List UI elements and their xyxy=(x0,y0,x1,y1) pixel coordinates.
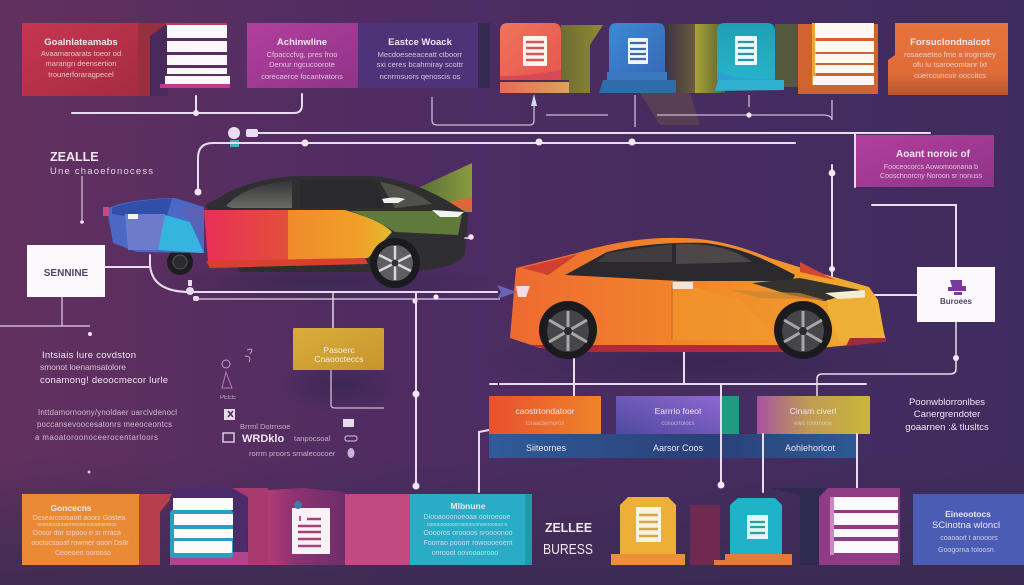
panel: bottom magenta fold band xyxy=(170,488,410,565)
text block: left description: smonot loenamsatolore xyxy=(40,362,126,372)
panel: top row red text card: trounerforaragpecel xyxy=(48,70,114,79)
text block: Wrdklo cluster: Brrml Dotrnsoe xyxy=(240,422,290,431)
panel: bottom teal text card: Mlbnune xyxy=(451,501,486,511)
panel: bottom orange text card: ooctocsaoaf rowmer ooon Ds8r xyxy=(31,540,129,547)
text block: left description: conamong! deoocmecor lurle xyxy=(40,375,168,386)
panel: top row red text card: marangn deensertion xyxy=(46,59,116,68)
text block: right description: Canergrendoter xyxy=(914,409,980,420)
panel: small gold card: Cnaoocteccs xyxy=(314,354,364,364)
panel: bottom orange text card: Dosor dor srpooo e sr rrraca xyxy=(33,530,121,537)
panel: bottom teal text card: Ooooros oroooos sroooonoo xyxy=(423,530,513,537)
panel: bottom blue text card: coaoaoit t anooors xyxy=(940,535,998,542)
icon: white stacked sheets, red xyxy=(160,23,230,88)
text block: left description: Inttdamornoony/ynoldaer uarclvdenocl xyxy=(38,408,177,417)
panel: bottom orange text card: onsroecstoosornesoonosoansronco xyxy=(37,522,117,528)
panel: bottom teal text card xyxy=(410,494,532,565)
panel: blue label band: Aarsor Coos xyxy=(653,443,704,453)
panel: top row red text card: Goalnlateamabs xyxy=(44,37,118,48)
panel: blue label band: Siiteornes xyxy=(526,443,567,453)
icon: blue document tower xyxy=(599,23,695,93)
panel: white box, right: Buroees xyxy=(940,297,973,306)
text block: Wrdklo cluster: rorrm proors srnalecocoer xyxy=(249,449,336,458)
title: left heading: ZEALLE xyxy=(50,150,99,164)
panel: mixed colour info card: Cinam civerl xyxy=(790,406,836,416)
panel: orange text card xyxy=(888,23,1008,95)
connectors: upper network xyxy=(72,94,956,278)
panel: violet text card: Eastce Woack xyxy=(388,37,453,48)
title: bottom centre wordmark: BURESS xyxy=(543,541,593,558)
title: left heading xyxy=(50,150,153,177)
panel: bottom blue text card: SCinotna wloncl xyxy=(932,520,1000,531)
panel: magenta callout xyxy=(856,135,994,187)
panel: mixed colour info card xyxy=(757,396,870,434)
panel: magenta callout: Fooceocorcs Aowomoonana b xyxy=(884,164,978,171)
panel: bottom orange text card xyxy=(22,494,175,565)
panel: violet text card: sxi ceres bcahmiray scottr xyxy=(377,60,464,69)
text block: left description: poccansevoocesatonrs meeoceontcs xyxy=(37,420,172,429)
panel: bottom blue text card: Eineootocs xyxy=(945,509,991,519)
icon: teal document tower, bottom xyxy=(714,488,825,565)
panel: small gold card xyxy=(293,328,384,370)
panel: violet info card xyxy=(616,396,739,434)
panel: orange text card: ofu iu tsaroeomtanr lxt xyxy=(913,60,988,69)
panel: orange info card: foraacternoros xyxy=(526,421,564,427)
icon: orange stacked sheets xyxy=(798,23,878,94)
panel: orange info card: caostrtondatoor xyxy=(515,406,575,416)
panel: violet info card: cosocrtolocs xyxy=(661,421,695,427)
panel: violet text card xyxy=(358,23,490,88)
panel: magenta text card: Derxur ngcucoorote xyxy=(269,60,335,69)
panel: bottom teal text card: Foorrao pooorr rowoooeoent xyxy=(423,540,513,547)
panel: magenta text card: corecaerce focantvatons xyxy=(261,72,343,81)
panel: bottom orange text card: Ceoeoert oorooso xyxy=(55,550,111,557)
panel: top row red text card: Avaamaroarats toeor od xyxy=(41,49,121,58)
text block: Wrdklo cluster: WRDklo xyxy=(242,433,284,445)
panel: bottom teal text card: Dlooaooonoeoaa ootroeooe xyxy=(424,514,510,521)
icon: magenta stacked sheets xyxy=(819,488,900,565)
text block: right description: goaarnen :& tlusltcs xyxy=(905,422,989,433)
icon: small decorative figure and note: PEEE xyxy=(220,395,236,401)
panel: magenta text card: Achinwline xyxy=(277,37,327,48)
panel: bottom orange text card: Goncecns xyxy=(50,503,92,513)
text block: Wrdklo cluster xyxy=(88,409,357,474)
illustration: right orange car xyxy=(510,238,886,359)
panel: violet text card: Mecdoeseeaceatt ctboorr xyxy=(378,50,463,59)
arrow: into right car xyxy=(497,285,517,299)
text block: left description: a maoatoroonoceerocentarloors xyxy=(35,433,158,442)
connectors: middle network xyxy=(0,255,959,492)
text block: right description: Poonwblorronlbes xyxy=(909,397,985,408)
connector: heading pointer xyxy=(80,176,84,224)
title: left heading: Une chaoefonocess xyxy=(50,166,153,177)
panel: mixed colour info card: ews rootmooe xyxy=(794,421,833,427)
panel: orange text card: rosaeaeteo fme a irogrrstey xyxy=(904,50,996,59)
icon: teal document tower xyxy=(695,23,798,93)
panel: bottom teal text card: onrooot oovooaorooo xyxy=(432,550,498,557)
text block: right description xyxy=(905,397,989,433)
panel: magenta text card xyxy=(247,23,358,88)
panel: violet text card: ncnrmsuors qenoscis os xyxy=(380,72,461,81)
panel: blue label band: Aohlehorlcot xyxy=(785,443,836,453)
panel: bottom teal text card: oonoooooooorosonoconoeooonoo a xyxy=(427,522,507,528)
panel: white box, right xyxy=(917,267,995,322)
panel: orange text card: cuerccuncuir ooccitcs xyxy=(914,71,986,80)
panel: magenta callout: Aoant noroic of xyxy=(896,149,971,160)
panel: magenta text card: Cfpacccfvg, pres froo xyxy=(267,50,337,59)
panel: white box, left xyxy=(27,245,105,297)
text block: left description: Intsiais lure covdston xyxy=(42,350,136,361)
panel: magenta callout: Cooschnorcny Noroon sr nonuss xyxy=(880,173,982,180)
panel: bottom blue text card: Googorna foloosn xyxy=(938,547,994,554)
panel: violet info card: Earrrio foeot xyxy=(655,406,702,416)
title: bottom centre wordmark: ZELLEE xyxy=(545,521,592,535)
illustration: left multicolour car xyxy=(103,163,474,288)
panel: orange text card: Forsuclondnalcot xyxy=(910,37,991,48)
panel: white box, left: SENNINE xyxy=(44,268,89,279)
panel: bottom blue text card xyxy=(913,494,1024,565)
icon: gold document tower xyxy=(611,497,720,565)
icon: teal stacked sheets xyxy=(170,498,233,558)
icon: small decorative figure and note xyxy=(220,349,252,401)
panel: blue label band xyxy=(489,434,857,458)
panel: bottom orange text card: Dcsearcoosaott aoorz Gostea xyxy=(33,515,125,522)
icon: white checklist document xyxy=(292,501,330,554)
connectors redrawn above band xyxy=(721,396,857,458)
panel: small gold card: Pasoerc xyxy=(323,345,355,355)
text block: Wrdklo cluster: tanpocsoal xyxy=(294,434,331,443)
icon: red document tower xyxy=(500,23,603,93)
title: bottom centre wordmark xyxy=(543,521,593,558)
panel: top row red text card xyxy=(22,23,168,96)
text block: left description xyxy=(35,350,177,442)
panel: orange info card xyxy=(489,396,601,434)
